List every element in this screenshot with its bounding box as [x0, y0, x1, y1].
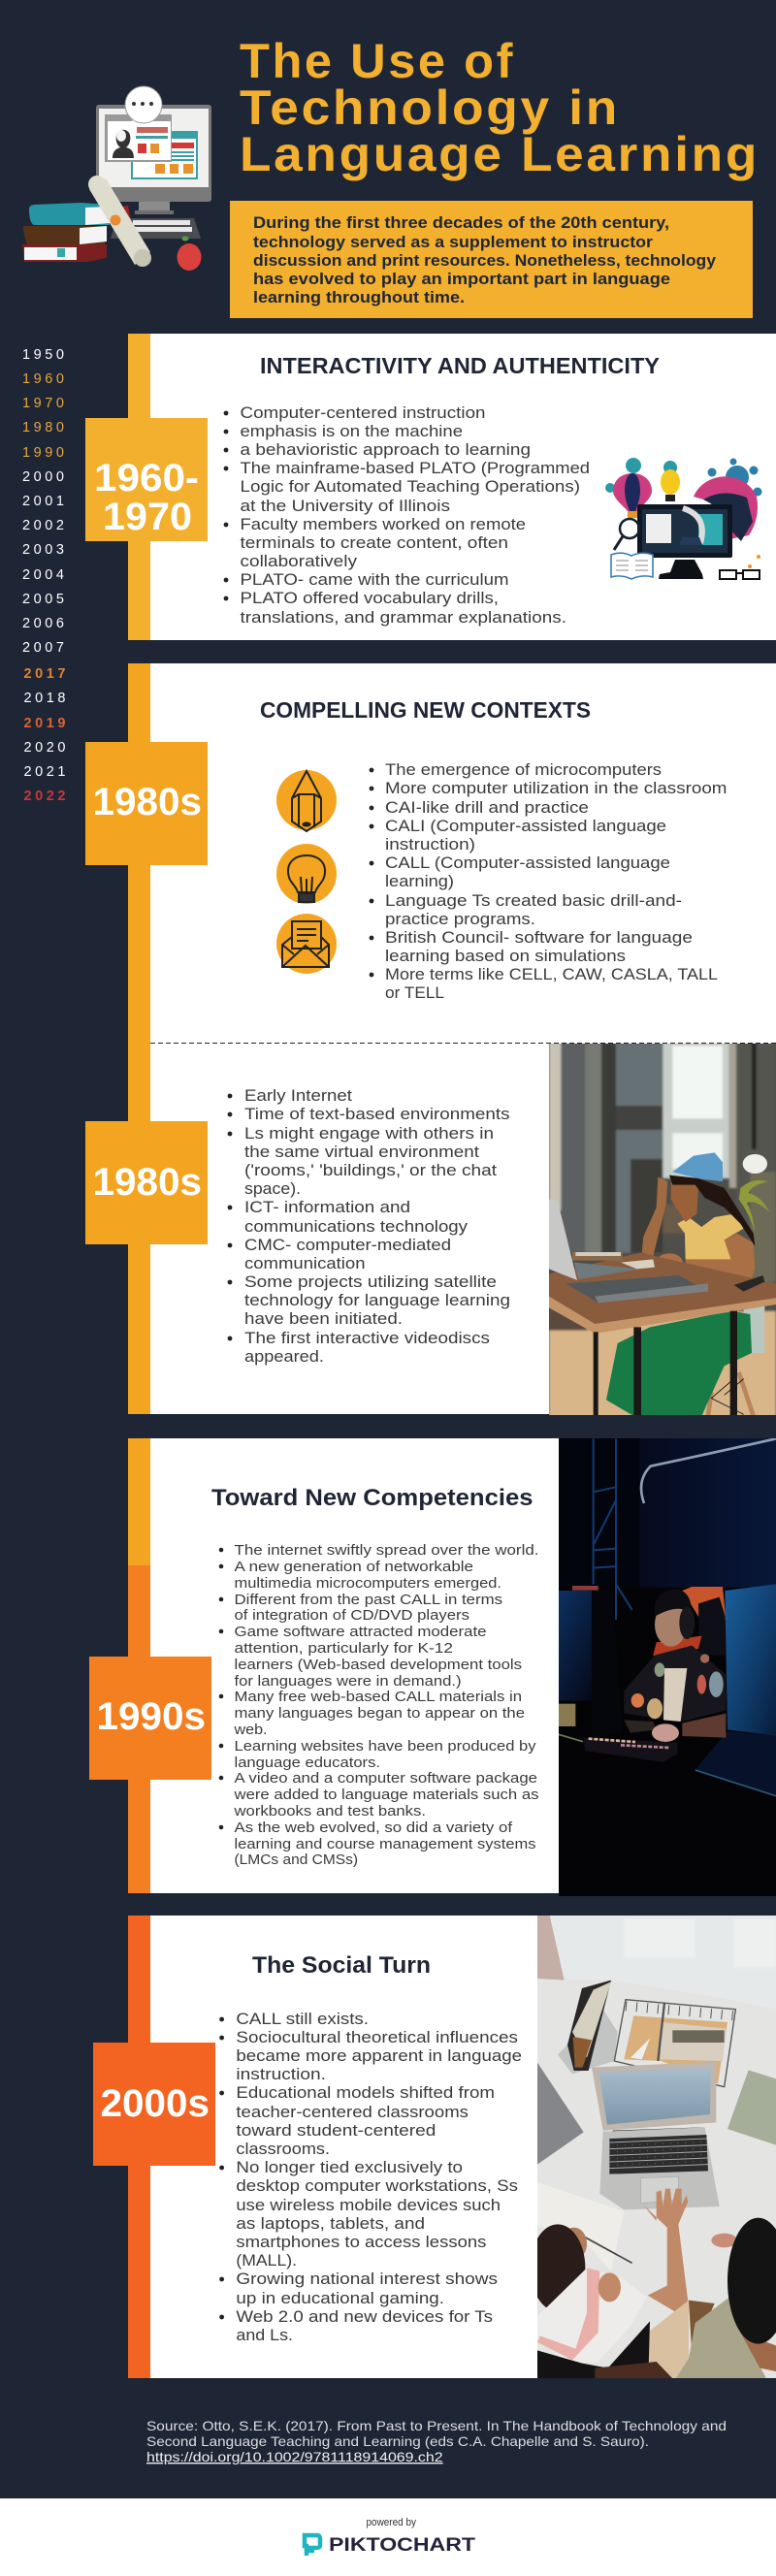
timeline year list: 2020 — [23, 740, 66, 756]
icon: computer monitor — [96, 105, 211, 239]
bullet list: contexts: More terms like CELL, CAW, CASLA, TALL — [385, 965, 718, 983]
bullet list: early internet: appeared. — [244, 1347, 324, 1366]
timeline year list: 2017 — [23, 666, 66, 682]
header illustration: computer, books, diploma and apple — [22, 86, 211, 271]
timeline year list: 2021 — [23, 764, 66, 780]
panel: the social turn — [93, 1916, 776, 2378]
bullet list: Learning websites have been produced by — [235, 1738, 536, 1755]
timeline year list — [22, 347, 66, 804]
bullet list: early internet: Ls might engage with others in — [244, 1124, 494, 1143]
timeline year list: 2006 — [22, 616, 64, 631]
timeline year list: 1980 — [22, 420, 64, 435]
bullet list: PLATO offered vocabulary drills, — [241, 589, 499, 607]
bullet list: (LMCs and CMSs) — [235, 1852, 358, 1868]
bullet list: Computer-centered instruction — [241, 403, 485, 422]
source citation: Second Language Teaching and Learning (eds C.A. Chapelle and S. Sauro). — [146, 2433, 649, 2449]
intro callout: During the first three decades of the 20th century, — [253, 213, 669, 232]
bullet list: attention, particularly for K-12 — [235, 1640, 453, 1657]
bullet list: up in educational gaming. — [236, 2289, 444, 2307]
bullet list: early internet: communications technology — [244, 1217, 469, 1236]
era tag: 1980s lower — [85, 1121, 208, 1244]
bullet list: multimedia microcomputers emerged. — [235, 1575, 501, 1592]
icon: speech bubble — [125, 86, 162, 126]
bullet list — [224, 403, 590, 627]
icon: pencil — [276, 770, 337, 831]
intro callout: technology served as a supplement to instructor — [253, 233, 653, 251]
photo: students with laptop from above — [531, 1916, 776, 2378]
bullet list: The internet swiftly spread over the world. — [235, 1542, 539, 1559]
bullet list: The mainframe-based PLATO (Programmed — [241, 459, 590, 477]
bullet list: Game software attracted moderate — [235, 1624, 487, 1640]
timeline year list: 1970 — [22, 396, 64, 411]
timeline year list: 2004 — [22, 567, 64, 583]
title: The Use of — [240, 34, 515, 88]
bullet list: PLATO- came with the curriculum — [241, 570, 508, 589]
icon: apple — [177, 237, 202, 271]
bullet list: Logic for Automated Teaching Operations) — [241, 477, 580, 496]
timeline year list: 2019 — [23, 716, 66, 731]
bullet list: contexts: CAI-like drill and practice — [385, 798, 589, 817]
bullet list: A video and a computer software package — [235, 1770, 537, 1787]
bullet list: contexts: Language Ts created basic drill-and- — [385, 891, 682, 910]
footer: powered by Piktochart: powered by — [367, 2517, 416, 2528]
bullet list: contexts: More computer utilization in the classroom — [385, 779, 728, 797]
timeline year list: 2005 — [22, 592, 64, 607]
title — [240, 34, 760, 181]
bullet list: contexts: or TELL — [385, 983, 444, 1002]
icon: envelope with letter — [276, 914, 337, 974]
heading: COMPELLING NEW CONTEXTS — [260, 697, 591, 723]
bullet list: contexts: learning based on simulations — [385, 947, 626, 965]
footer: powered by Piktochart: PIKTOCHART — [329, 2535, 475, 2556]
bullet list: emphasis is on the machine — [241, 422, 463, 440]
bullet list: Faculty members worked on remote — [241, 515, 526, 533]
timeline year list: 2007 — [22, 640, 64, 656]
bullet list: early internet: the same virtual environment — [244, 1143, 479, 1161]
bullet list: early internet — [228, 1086, 510, 1366]
bullet list: early internet: have been initiated. — [244, 1309, 403, 1328]
panel: interactivity and authenticity — [85, 334, 776, 640]
bullet list: early internet: The first interactive videodiscs — [244, 1329, 490, 1347]
era tag: 1960-1970: 1970 — [103, 496, 192, 538]
bullet list: terminals to create content, often — [241, 533, 508, 552]
chair legs are part of the photo — [708, 1372, 754, 1416]
bullet list: workbooks and test banks. — [233, 1803, 426, 1819]
bullet list: contexts: British Council- software for language — [385, 928, 693, 947]
bullet list: contexts: learning) — [385, 872, 454, 890]
era tag: 1960-1970: 1960- — [94, 457, 199, 499]
timeline year list: 1960 — [22, 371, 64, 387]
footer: powered by Piktochart — [0, 2498, 776, 2576]
bullet list: smartphones to access lessons — [236, 2233, 486, 2251]
timeline year list: 2002 — [22, 518, 64, 533]
source citation: Source: Otto, S.E.K. (2017). From Past to Present. In The Handbook of Technology and — [146, 2418, 727, 2433]
bullet list: early internet: Some projects utilizing satellite — [244, 1272, 497, 1291]
source citation — [146, 2418, 727, 2464]
bullet list: early internet: Early Internet — [244, 1086, 352, 1105]
bullet list — [219, 1542, 538, 1868]
heading: The Social Turn — [252, 1952, 431, 1979]
bullet list: at the University of Illinois — [241, 497, 450, 515]
bullet list: for languages were in demand.) — [235, 1673, 462, 1690]
source citation: https://doi.org/10.1002/9781118914069.ch2 — [146, 2449, 443, 2464]
bullet list: as laptops, tablets, and — [236, 2214, 425, 2233]
bullet list: collaboratively — [241, 552, 358, 570]
bullet list: contexts: practice programs. — [385, 910, 535, 928]
bullet list: toward student-centered — [236, 2121, 436, 2140]
era tag: 1980s upper: 1980s — [93, 781, 202, 823]
bullet list: translations, and grammar explanations. — [241, 608, 566, 627]
heading: Toward New Competencies — [211, 1485, 534, 1511]
timeline year list: 2022 — [23, 789, 66, 804]
bullet list: Different from the past CALL in terms — [235, 1592, 502, 1608]
intro callout — [230, 201, 753, 318]
panel: toward new competencies — [89, 1435, 776, 1898]
bullet list: early internet: technology for language learning — [244, 1291, 510, 1309]
era tag: 2000s: 2000s — [101, 2082, 210, 2125]
bullet list: early internet: CMC- computer-mediated — [244, 1236, 451, 1254]
bullet list: CALL still exists. — [236, 2010, 369, 2028]
timeline year list: 1950 — [22, 347, 64, 363]
bullet list: contexts — [370, 760, 728, 1002]
bullet list: early internet: space). — [244, 1179, 301, 1198]
bullet list: Many free web-based CALL materials in — [235, 1689, 522, 1705]
intro callout: discussion and print resources. Nonetheless, technology — [253, 251, 717, 270]
photo: gamer at keyboard in dark room — [559, 1435, 776, 1898]
timeline year list: 1990 — [22, 445, 64, 461]
bullet list: many languages began to appear on the — [235, 1705, 525, 1722]
timeline year list: 2000 — [22, 469, 64, 485]
bullet list: Sociocultural theoretical influences — [236, 2028, 518, 2046]
bullet list: (MALL). — [236, 2251, 297, 2270]
bullet list: Web 2.0 and new devices for Ts — [236, 2307, 493, 2326]
heading: INTERACTIVITY AND AUTHENTICITY — [260, 353, 660, 378]
bullet list: desktop computer workstations, Ss — [236, 2176, 518, 2195]
timeline year list: 2018 — [23, 691, 66, 706]
bullet list: language educators. — [235, 1755, 380, 1771]
bullet list: early internet: communication — [244, 1254, 365, 1272]
bullet list: learning and course management systems — [235, 1836, 535, 1852]
bullet list: became more apparent in language — [236, 2046, 522, 2065]
bullet list: of integration of CD/DVD players — [235, 1607, 469, 1624]
intro callout: learning throughout time. — [253, 288, 465, 306]
bullet list: a behavioristic approach to learning — [241, 440, 531, 459]
title: Language Learning — [240, 127, 760, 181]
bullet list: were added to language materials such as — [233, 1787, 538, 1803]
icon: diploma scroll — [88, 176, 151, 267]
illustration: online education collage — [605, 458, 762, 579]
bullet list: No longer tied exclusively to — [236, 2158, 463, 2176]
icon: Piktochart logo — [305, 2535, 320, 2556]
icon: stack of books — [22, 203, 110, 262]
bullet list: early internet: ICT- information and — [244, 1198, 410, 1216]
bullet list: teacher-centered classrooms — [236, 2103, 469, 2121]
icon: light bulb — [276, 844, 337, 904]
bullet list: contexts: The emergence of microcomputers — [385, 760, 662, 779]
bullet list: and Ls. — [236, 2326, 293, 2344]
bullet list: A new generation of networkable — [235, 1559, 473, 1575]
title: Technology in — [240, 80, 620, 135]
bullet list: learners (Web-based development tools — [235, 1657, 522, 1673]
bullet list: early internet: ('rooms,' 'buildings,' or the chat — [244, 1161, 497, 1179]
bullet list: use wireless mobile devices such — [236, 2196, 501, 2214]
panel: compelling new contexts and early internet — [85, 663, 776, 1418]
era tag: 1960-1970 — [85, 418, 208, 541]
timeline year list: 2001 — [22, 494, 64, 509]
bullet list: early internet: Time of text-based environments — [244, 1105, 510, 1123]
bullet list: contexts: CALL (Computer-assisted language — [385, 853, 670, 872]
timeline year list: 2003 — [22, 542, 64, 558]
bullet list: web. — [233, 1722, 268, 1738]
photo: girl studying at laptop — [549, 1043, 776, 1418]
bullet list: As the web evolved, so did a variety of — [235, 1819, 513, 1836]
era tag: 1990s: 1990s — [97, 1695, 206, 1738]
bullet list: contexts: instruction) — [385, 835, 475, 853]
bullet list: contexts: CALI (Computer-assisted language — [385, 817, 666, 835]
era tag: 1990s — [89, 1657, 211, 1780]
bullet list — [219, 2010, 522, 2344]
intro callout: has evolved to play an important part in language — [253, 270, 670, 288]
bullet list: classrooms. — [236, 2140, 330, 2158]
bullet list: Educational models shifted from — [236, 2083, 495, 2102]
era tag: 1980s upper — [85, 742, 208, 865]
bullet list: instruction. — [236, 2065, 326, 2083]
era tag: 1980s lower: 1980s — [93, 1161, 202, 1204]
bullet list: Growing national interest shows — [236, 2270, 498, 2288]
era tag: 2000s — [93, 2043, 215, 2166]
